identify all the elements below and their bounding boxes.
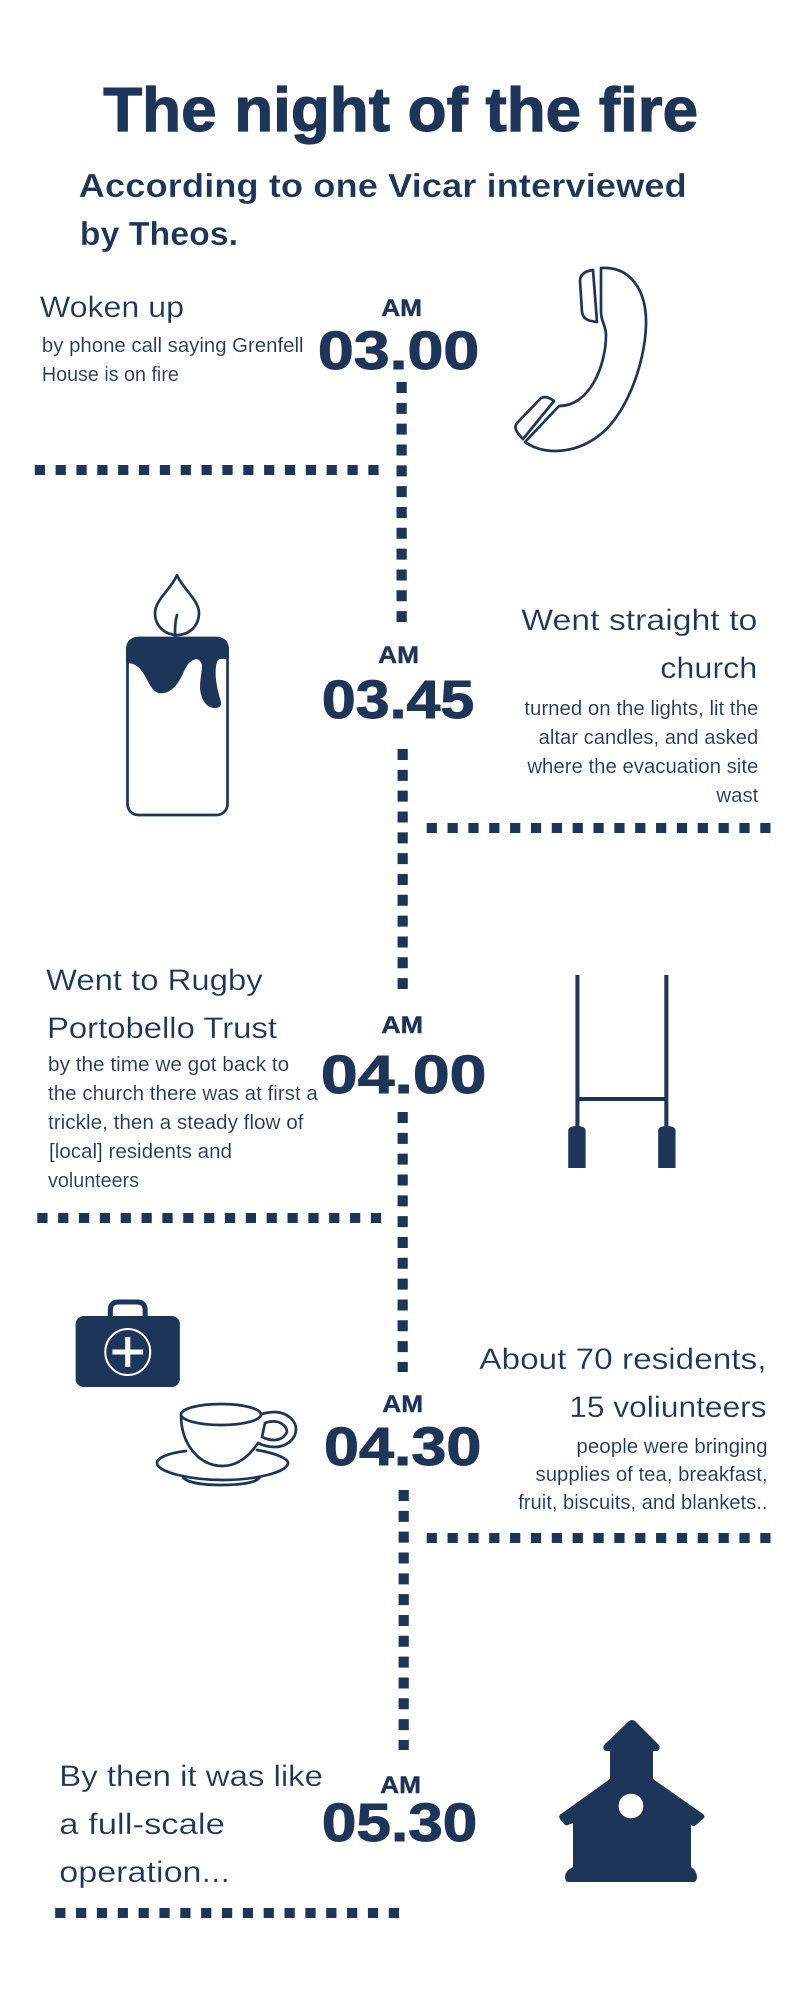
divider: dotted line [427,1533,771,1543]
text: went to Rugby Portobello Trust: [local] residents and [49,1141,232,1163]
time: AM 03.45 [322,642,474,730]
text: woken up: Woken up [40,291,184,324]
icon: rugby goal posts [568,975,676,1168]
text: went to Rugby Portobello Trust: Went to Rugby [46,964,264,997]
time: AM 04.30: AM [382,1391,423,1418]
text: woken up: House is on fire [42,364,179,386]
text: went to Rugby Portobello Trust: trickle, then a steady flow of [48,1112,304,1134]
divider: dotted line [427,823,771,833]
step 3: 04.00 [37,964,676,1218]
step 1: 03.00 [35,268,646,470]
text: went straight to church: wast [715,785,759,807]
time: AM 03.00: 03.00 [318,321,479,381]
text: went straight to church: turned on the lights, lit the [524,698,758,720]
icon: church [559,1720,704,1882]
text: went straight to church: church [660,652,757,685]
time: AM 03.45: 03.45 [322,670,474,730]
subtitle: by Theos. [80,216,238,253]
time: AM 04.00: AM [381,1012,423,1039]
icon: tea cup and saucer [157,1404,296,1485]
text: woken up [40,291,304,386]
time: AM 05.30: AM [380,1772,421,1799]
text: went to Rugby Portobello Trust: volunteers [48,1170,139,1192]
step 5: 05.30 [55,1720,705,1913]
time: AM 04.00: 04.00 [321,1045,486,1105]
text: went to Rugby Portobello Trust: the church there was at first a [48,1083,319,1105]
text: about 70 residents: fruit, biscuits, and blankets.. [518,1492,768,1514]
text: by then it was like a full-scale operation: operation... [59,1856,230,1889]
text: by then it was like a full-scale operation: By then it was like [59,1760,323,1793]
text: about 70 residents: supplies of tea, breakfast, [536,1464,768,1486]
time: AM 03.45: AM [378,642,419,669]
title: The night of the fire [103,76,698,145]
text: went straight to church [521,604,759,807]
time: AM 04.30: 04.30 [324,1417,481,1477]
text: about 70 residents: 15 voliunteers [569,1391,766,1424]
icon: telephone handset [515,268,646,451]
divider: dotted line [35,465,379,475]
text: went straight to church: where the evacuation site [526,756,758,778]
divider: dotted line [55,1908,400,1918]
text: went straight to church: altar candles, and asked [539,727,758,749]
step 4: 04.30 [76,1302,771,1538]
text: went to Rugby Portobello Trust: Portobello Trust [47,1012,278,1045]
time: AM 03.00: AM [381,295,422,322]
text: woken up: by phone call saying Grenfell [42,335,304,357]
text: went to Rugby Portobello Trust [46,964,319,1192]
text: by then it was like a full-scale operation: a full-scale [59,1808,225,1841]
step 2: 03.45 [126,575,771,828]
icon: candle [126,575,229,815]
divider: dotted line [37,1213,382,1223]
text: went to Rugby Portobello Trust: by the time we got back to [48,1054,289,1076]
timeline: vertical dotted line segments [402,382,404,1750]
time: AM 04.00 [321,1012,486,1105]
time: AM 05.30: 05.30 [322,1793,477,1853]
icon: first aid kit [76,1302,180,1387]
time: AM 03.00 [318,295,479,381]
text: by then it was like a full-scale operation [59,1760,323,1889]
text: about 70 residents: people were bringing [576,1436,768,1458]
time: AM 05.30 [322,1772,477,1853]
text: about 70 residents: About 70 residents, [479,1343,766,1376]
subtitle: According to one Vicar interviewed [79,168,687,205]
text: went straight to church: Went straight to [521,604,757,637]
subtitle [79,168,687,253]
text: about 70 residents [479,1343,768,1514]
time: AM 04.30 [324,1391,481,1477]
